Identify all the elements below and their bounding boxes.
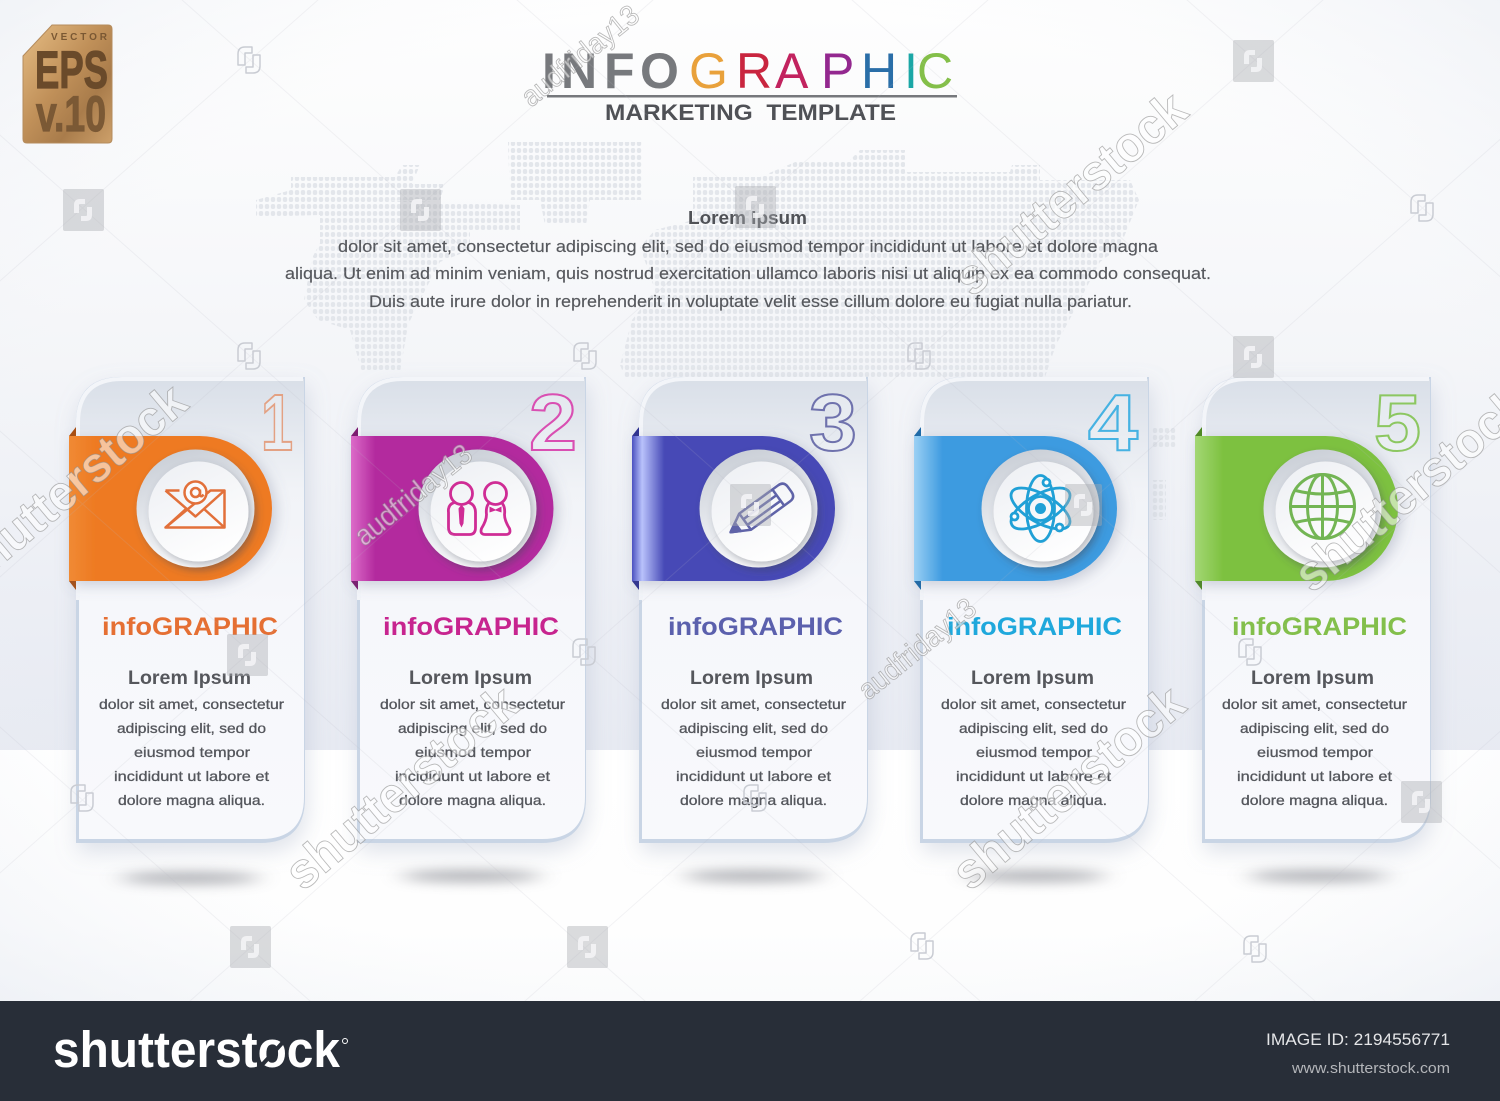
card text: adipiscing elit, sed do [1240,720,1389,736]
card text [99,668,284,808]
intro text block [285,208,1211,311]
card text: dolore magna aliqua. [680,792,827,808]
intro text block: dolor sit amet, consectetur adipiscing elit, sed do eiusmod tempor incididunt ut labore et dolore magna [338,237,1159,256]
intro text block: aliqua. Ut enim ad minim veniam, quis nostrud exercitation ullamco laboris nisi ut aliquip ex ea commodo consequat. [285,264,1211,283]
watermark square logo marks [74,50,1430,958]
icon: envelope button [136,450,254,568]
number 3: 3 [809,378,857,467]
number 2: 2 [529,378,577,467]
title [542,43,957,125]
card text: dolore magna aliqua. [1241,792,1388,808]
title: INFOGRA PHIC [542,43,953,99]
card text: dolore magna aliqua. [960,792,1107,808]
card title: infoGRAPHIC [383,613,559,641]
ribbon [1195,427,1202,590]
background wall [0,0,1500,750]
watermark squares [63,40,1442,968]
ribbon [351,427,358,590]
card text: adipiscing elit, sed do [679,720,828,736]
card text: Lorem Ipsum [409,668,532,689]
watermark text: audfriday13 [852,592,983,706]
footer url: www.shutterstock.com [1291,1061,1450,1077]
watermark logo marks [71,47,1433,962]
card text: Lorem Ipsum [128,668,251,689]
intro text block: Duis aute irure dolor in reprehenderit in voluptate velit esse cillum dolore eu fugiat nulla pariatur. [369,292,1132,311]
card text: adipiscing elit, sed do [117,720,266,736]
card text [941,668,1126,808]
card text: incididunt ut labore et [956,768,1111,784]
icon: pencil button [700,450,818,568]
card text: adipiscing elit, sed do [398,720,547,736]
card text: dolor sit amet, consectetur [380,696,565,712]
panel: card 5 [1195,377,1431,882]
card text: Lorem Ipsum [971,668,1094,689]
ribbon [69,427,76,590]
number 4: 4 [1088,378,1139,467]
card text: incididunt ut labore et [1237,768,1392,784]
card text: eiusmod tempor [976,744,1092,760]
card text: incididunt ut labore et [676,768,831,784]
background floor [0,750,1500,1001]
card title: infoGRAPHIC [1232,613,1407,641]
card text: dolor sit amet, consectetur [661,696,846,712]
card text: dolor sit amet, consectetur [99,696,284,712]
card text [661,668,846,808]
icon: globe button [1264,450,1382,568]
watermark text: audfriday13 [348,438,479,552]
card text [380,668,565,808]
badge: EPS vector v.10: EPS [35,41,108,100]
card text: eiusmod tempor [134,744,250,760]
image id: IMAGE ID: 2194556771 [1266,1031,1450,1049]
watermark text: shutterstock [274,674,529,900]
dotted world map [256,142,1176,520]
card text: dolore magna aliqua. [118,792,265,808]
card title: infoGRAPHIC [102,613,278,641]
footer logo: shutterstock [53,1021,341,1078]
number 5: 5 [1374,378,1421,467]
card text: incididunt ut labore et [114,768,269,784]
intro text block: Lorem Ipsum [688,208,807,228]
panel: card 4 [914,377,1149,882]
card text: eiusmod tempor [696,744,812,760]
card text: Lorem Ipsum [1251,668,1374,689]
card title: infoGRAPHIC [668,613,843,641]
card text: incididunt ut labore et [395,768,550,784]
card title: infoGRAPHIC [947,613,1122,641]
panel: card 2 [351,377,586,882]
icon: atom button [982,450,1100,568]
ribbon [632,427,639,590]
footer bar [0,1001,1500,1101]
badge label: VECTOR [51,32,108,43]
card text [1222,668,1407,808]
icon: people button [418,450,536,568]
badge: EPS vector v.10 [23,25,112,143]
watermark text: shutterstock [943,80,1198,306]
card text: dolor sit amet, consectetur [941,696,1126,712]
badge: EPS vector v.10: v.10 [36,86,106,142]
panel: card 3 [632,377,868,882]
panel: card 1 [69,377,305,884]
watermark text: shutterstock [941,674,1196,900]
card text: dolore magna aliqua. [399,792,546,808]
card text: adipiscing elit, sed do [959,720,1108,736]
card text: Lorem Ipsum [690,668,813,689]
number 1: 1 [261,378,293,467]
ribbon [914,427,921,590]
card text: eiusmod tempor [1257,744,1373,760]
subtitle: MARKETING TEMPLATE [605,100,896,125]
card text: dolor sit amet, consectetur [1222,696,1407,712]
card text: eiusmod tempor [415,744,531,760]
